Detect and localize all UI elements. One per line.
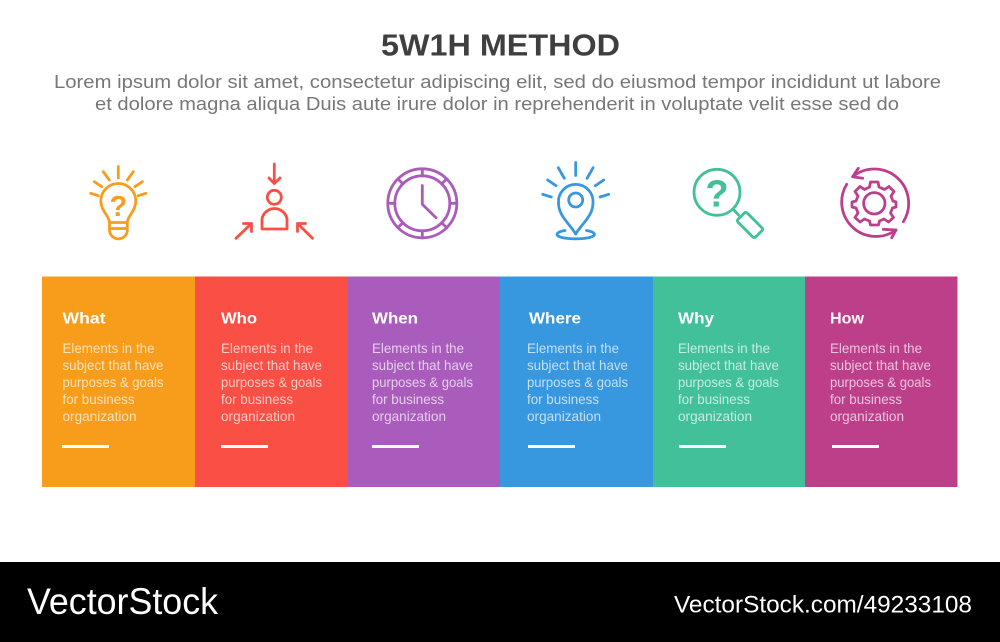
panel: who <box>195 276 348 487</box>
panel: why <box>653 276 805 487</box>
body text: who: purposes & goals <box>221 374 322 390</box>
body text: where: subject that have <box>527 357 628 373</box>
body text: who <box>221 340 322 424</box>
subtitle text: et dolore magna aliqua Duis aute irure dolor in reprehenderit in voluptate velit esse sed do <box>95 94 899 114</box>
body text: how: purposes & goals <box>830 374 931 390</box>
body text: what: subject that have <box>62 357 164 373</box>
body text: why <box>678 340 779 424</box>
heading: how: How <box>830 310 865 328</box>
underline: where <box>528 445 575 448</box>
body text: how: organization <box>830 408 904 424</box>
body text: how: subject that have <box>830 357 931 373</box>
underline: what <box>62 445 109 448</box>
body text: where <box>527 340 628 424</box>
body text: how: Elements in the <box>830 340 922 356</box>
body text: where: Elements in the <box>527 340 619 356</box>
underline: when <box>372 445 419 448</box>
underline: who <box>221 445 268 448</box>
body text: when: organization <box>372 408 446 424</box>
body text: who: subject that have <box>221 357 322 373</box>
body text: how <box>830 340 931 424</box>
body text: why: purposes & goals <box>678 374 779 390</box>
footer bar <box>0 562 1000 642</box>
body text: when: for business <box>372 391 444 407</box>
panel: where <box>500 276 653 487</box>
body text: why: subject that have <box>678 357 779 373</box>
body text: where: organization <box>527 408 601 424</box>
body text: when: subject that have <box>372 357 473 373</box>
icon: location pin <box>543 162 609 239</box>
body text: where: for business <box>527 391 599 407</box>
footer logo: VectorStock <box>27 581 218 622</box>
icon: gear with circular arrows <box>842 168 909 238</box>
body text: when: purposes & goals <box>372 374 473 390</box>
body text: what: purposes & goals <box>62 374 164 390</box>
body text: who: for business <box>221 391 293 407</box>
subtitle text <box>54 72 941 114</box>
body text: who: organization <box>221 408 295 424</box>
icon: light bulb with question mark: ? <box>109 191 127 223</box>
panel: what <box>42 276 195 487</box>
heading: where: Where <box>529 310 581 328</box>
heading: why: Why <box>678 310 714 328</box>
icon: person with three arrows <box>236 164 312 238</box>
underline: why <box>679 445 726 448</box>
body text: what: for business <box>62 391 134 407</box>
subtitle text: Lorem ipsum dolor sit amet, consectetur adipiscing elit, sed do eiusmod tempor incididunt ut labore <box>54 72 941 92</box>
footer url: VectorStock.com/49233108 <box>674 592 972 618</box>
body text: what <box>62 340 164 424</box>
icon: clock <box>388 169 457 238</box>
heading: what: What <box>62 310 106 328</box>
heading: when: When <box>372 310 418 328</box>
icon: light bulb with question mark <box>91 166 146 239</box>
body text: why: for business <box>678 391 750 407</box>
body text: who: Elements in the <box>221 340 313 356</box>
body text: how: for business <box>830 391 902 407</box>
body text: why: organization <box>678 408 752 424</box>
panel: when <box>348 276 500 487</box>
panel: how <box>805 276 958 487</box>
body text: what: Elements in the <box>62 340 155 356</box>
icon: magnifying glass with question mark <box>694 169 763 238</box>
body text: what: organization <box>62 408 136 424</box>
title: 5W1H METHOD <box>381 28 620 62</box>
body text: when: Elements in the <box>372 340 464 356</box>
body text: when <box>372 340 473 424</box>
body text: why: Elements in the <box>678 340 770 356</box>
icon: magnifying glass with question mark: ? <box>705 174 729 216</box>
heading: who: Who <box>221 310 257 328</box>
body text: where: purposes & goals <box>527 374 628 390</box>
underline: how <box>832 445 879 448</box>
